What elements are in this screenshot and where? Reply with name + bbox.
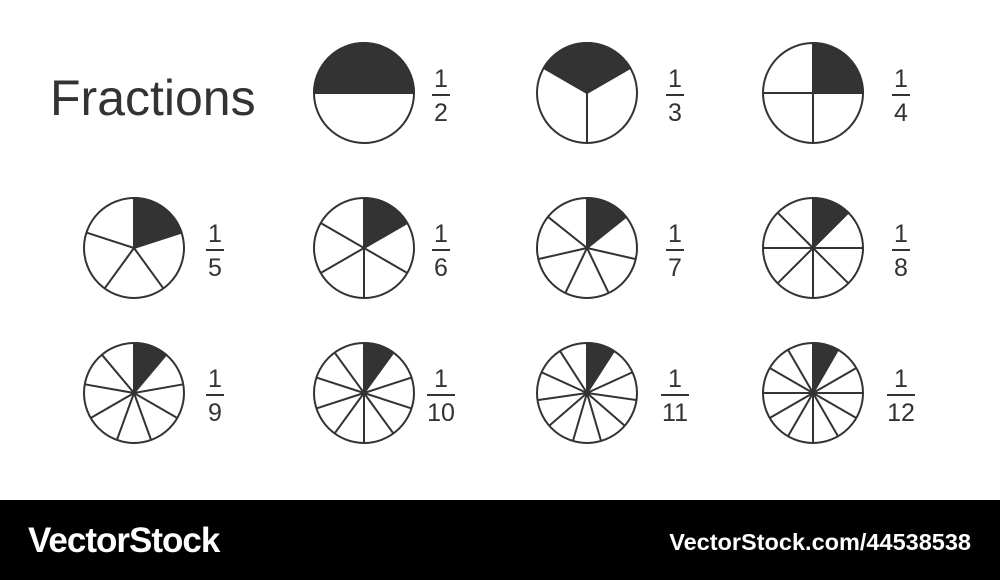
pie: 1/3 (537, 43, 637, 143)
footer bar: VectorStock.com/44538538 (669, 529, 971, 555)
fraction labels: 1 (894, 220, 908, 248)
fraction labels: 1 (434, 65, 448, 93)
fraction labels: 3 (668, 99, 682, 127)
fraction labels: 1 (434, 365, 448, 393)
fraction labels: 4 (894, 99, 908, 127)
fraction labels: 6 (434, 254, 448, 282)
footer bar (0, 500, 1000, 580)
pie: 1/9 (84, 343, 184, 443)
fraction labels: 5 (208, 254, 222, 282)
footer bar: VectorStock (28, 521, 221, 560)
fraction labels (206, 65, 915, 427)
fraction labels: 1 (208, 220, 222, 248)
pie: 1/4 (763, 43, 863, 143)
pie: 1/5 (84, 198, 184, 298)
pie: 1/8 (763, 198, 863, 298)
pie: 1/10 (314, 343, 414, 443)
pie: 1/7 (537, 198, 637, 298)
pie: 1/12 (763, 343, 863, 443)
fraction labels: 1 (668, 365, 682, 393)
pie: 1/6 (314, 198, 414, 298)
fraction labels: 1 (668, 65, 682, 93)
fraction labels: 11 (662, 399, 688, 427)
fraction labels: 10 (427, 399, 455, 427)
fraction labels: 1 (208, 365, 222, 393)
title: Fractions (50, 70, 256, 126)
fraction labels: 1 (434, 220, 448, 248)
fraction labels: 9 (208, 399, 222, 427)
fraction labels: 1 (668, 220, 682, 248)
fraction labels: 8 (894, 254, 908, 282)
fraction labels: 1 (894, 365, 908, 393)
fraction labels: 1 (894, 65, 908, 93)
fraction labels: 2 (434, 99, 448, 127)
fraction labels: 12 (887, 399, 915, 427)
pie: 1/11 (537, 343, 637, 443)
fraction labels: 7 (668, 254, 682, 282)
pie: 1/2 (314, 43, 414, 143)
